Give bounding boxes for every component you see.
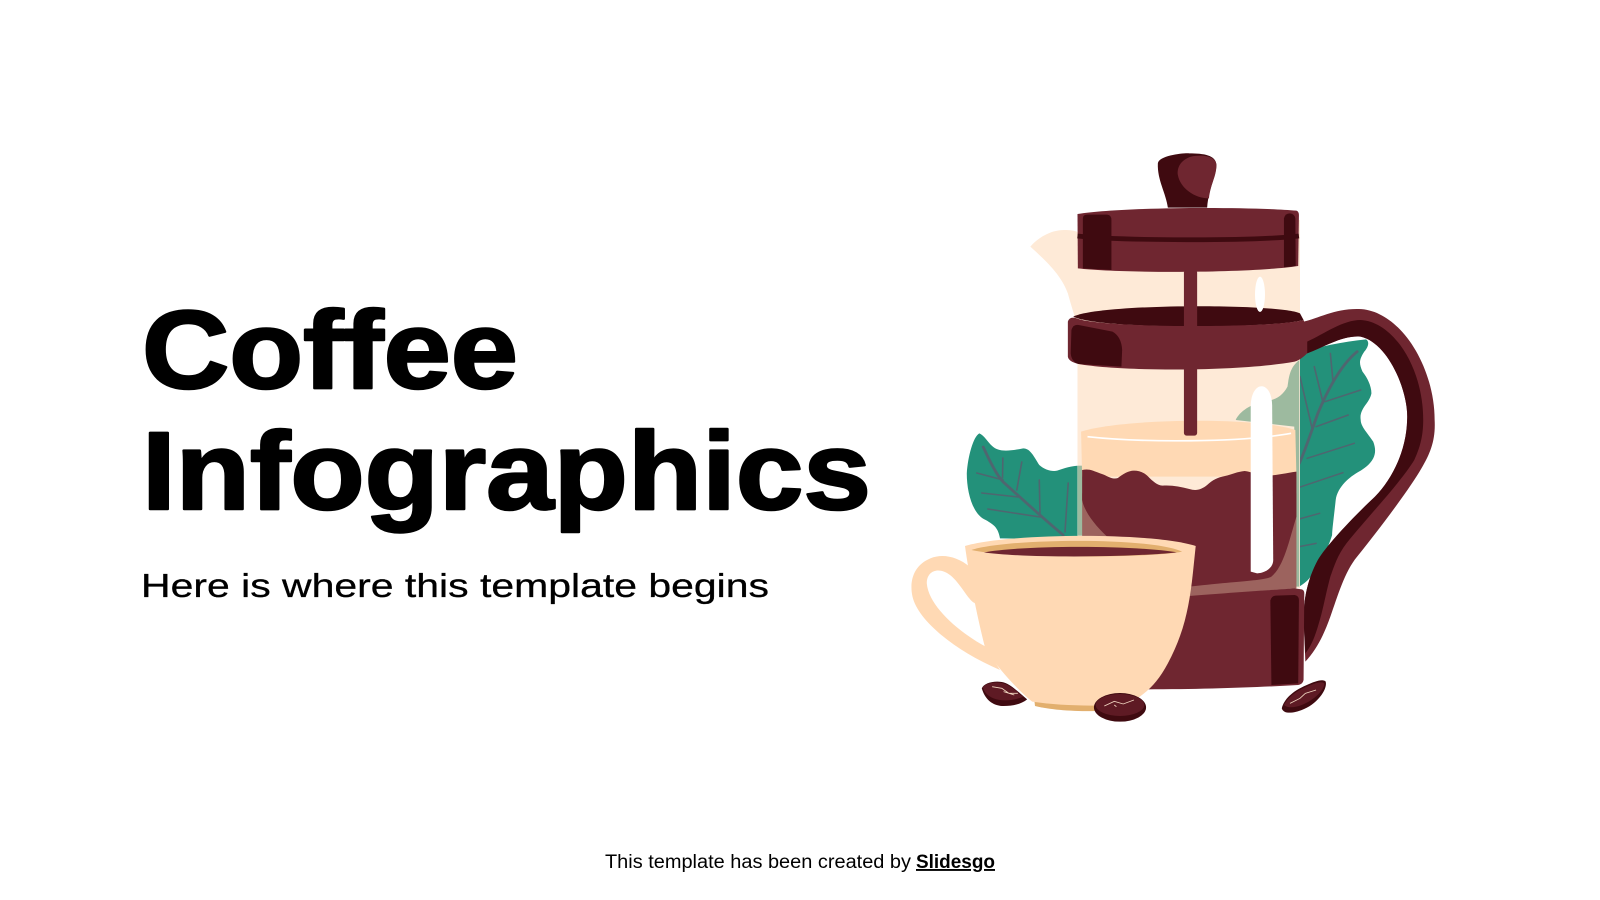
large glass highlight bbox=[1251, 386, 1273, 573]
icon: left leaf bbox=[967, 433, 1080, 540]
left coffee bean bbox=[982, 682, 1027, 706]
milk foam layer bbox=[1081, 421, 1296, 477]
lower glass tint bbox=[1082, 493, 1296, 597]
left leaf seen through the glass bbox=[1078, 466, 1084, 536]
coffee in cup bbox=[984, 547, 1177, 556]
cup handle bbox=[911, 556, 1000, 670]
subtitle: Here is where this template begins bbox=[141, 568, 769, 605]
handle of french press bbox=[1304, 309, 1435, 662]
plunger collar band bbox=[1068, 318, 1307, 369]
icon: right leaf bbox=[1298, 339, 1375, 587]
credit line: This template has been created by bbox=[605, 852, 912, 873]
plunger rod bbox=[1184, 270, 1197, 436]
centre coffee bean bbox=[1094, 693, 1146, 722]
glass carafe with spout bbox=[1030, 220, 1300, 588]
press base bbox=[1146, 588, 1304, 689]
cup saucer foot bbox=[1034, 697, 1121, 711]
plunger collar opening bbox=[1073, 306, 1304, 326]
press lid bbox=[1077, 208, 1299, 272]
coffee cup bbox=[911, 536, 1196, 711]
right coffee bean bbox=[1282, 680, 1326, 713]
coffee in carafe bbox=[1082, 470, 1296, 587]
cup body bbox=[965, 536, 1196, 706]
press knob bbox=[1158, 153, 1216, 208]
small glass highlight bbox=[1255, 277, 1265, 312]
title: Coffee bbox=[142, 289, 518, 412]
credit line: Slidesgo bbox=[916, 852, 995, 873]
leaf seen through the glass bbox=[1236, 360, 1299, 587]
cup inner rim bbox=[971, 541, 1182, 556]
illustration: french press and coffee cup bbox=[911, 153, 1435, 722]
title bbox=[142, 289, 871, 533]
foam highlight line bbox=[1087, 433, 1291, 441]
title: Infographics bbox=[142, 410, 871, 533]
